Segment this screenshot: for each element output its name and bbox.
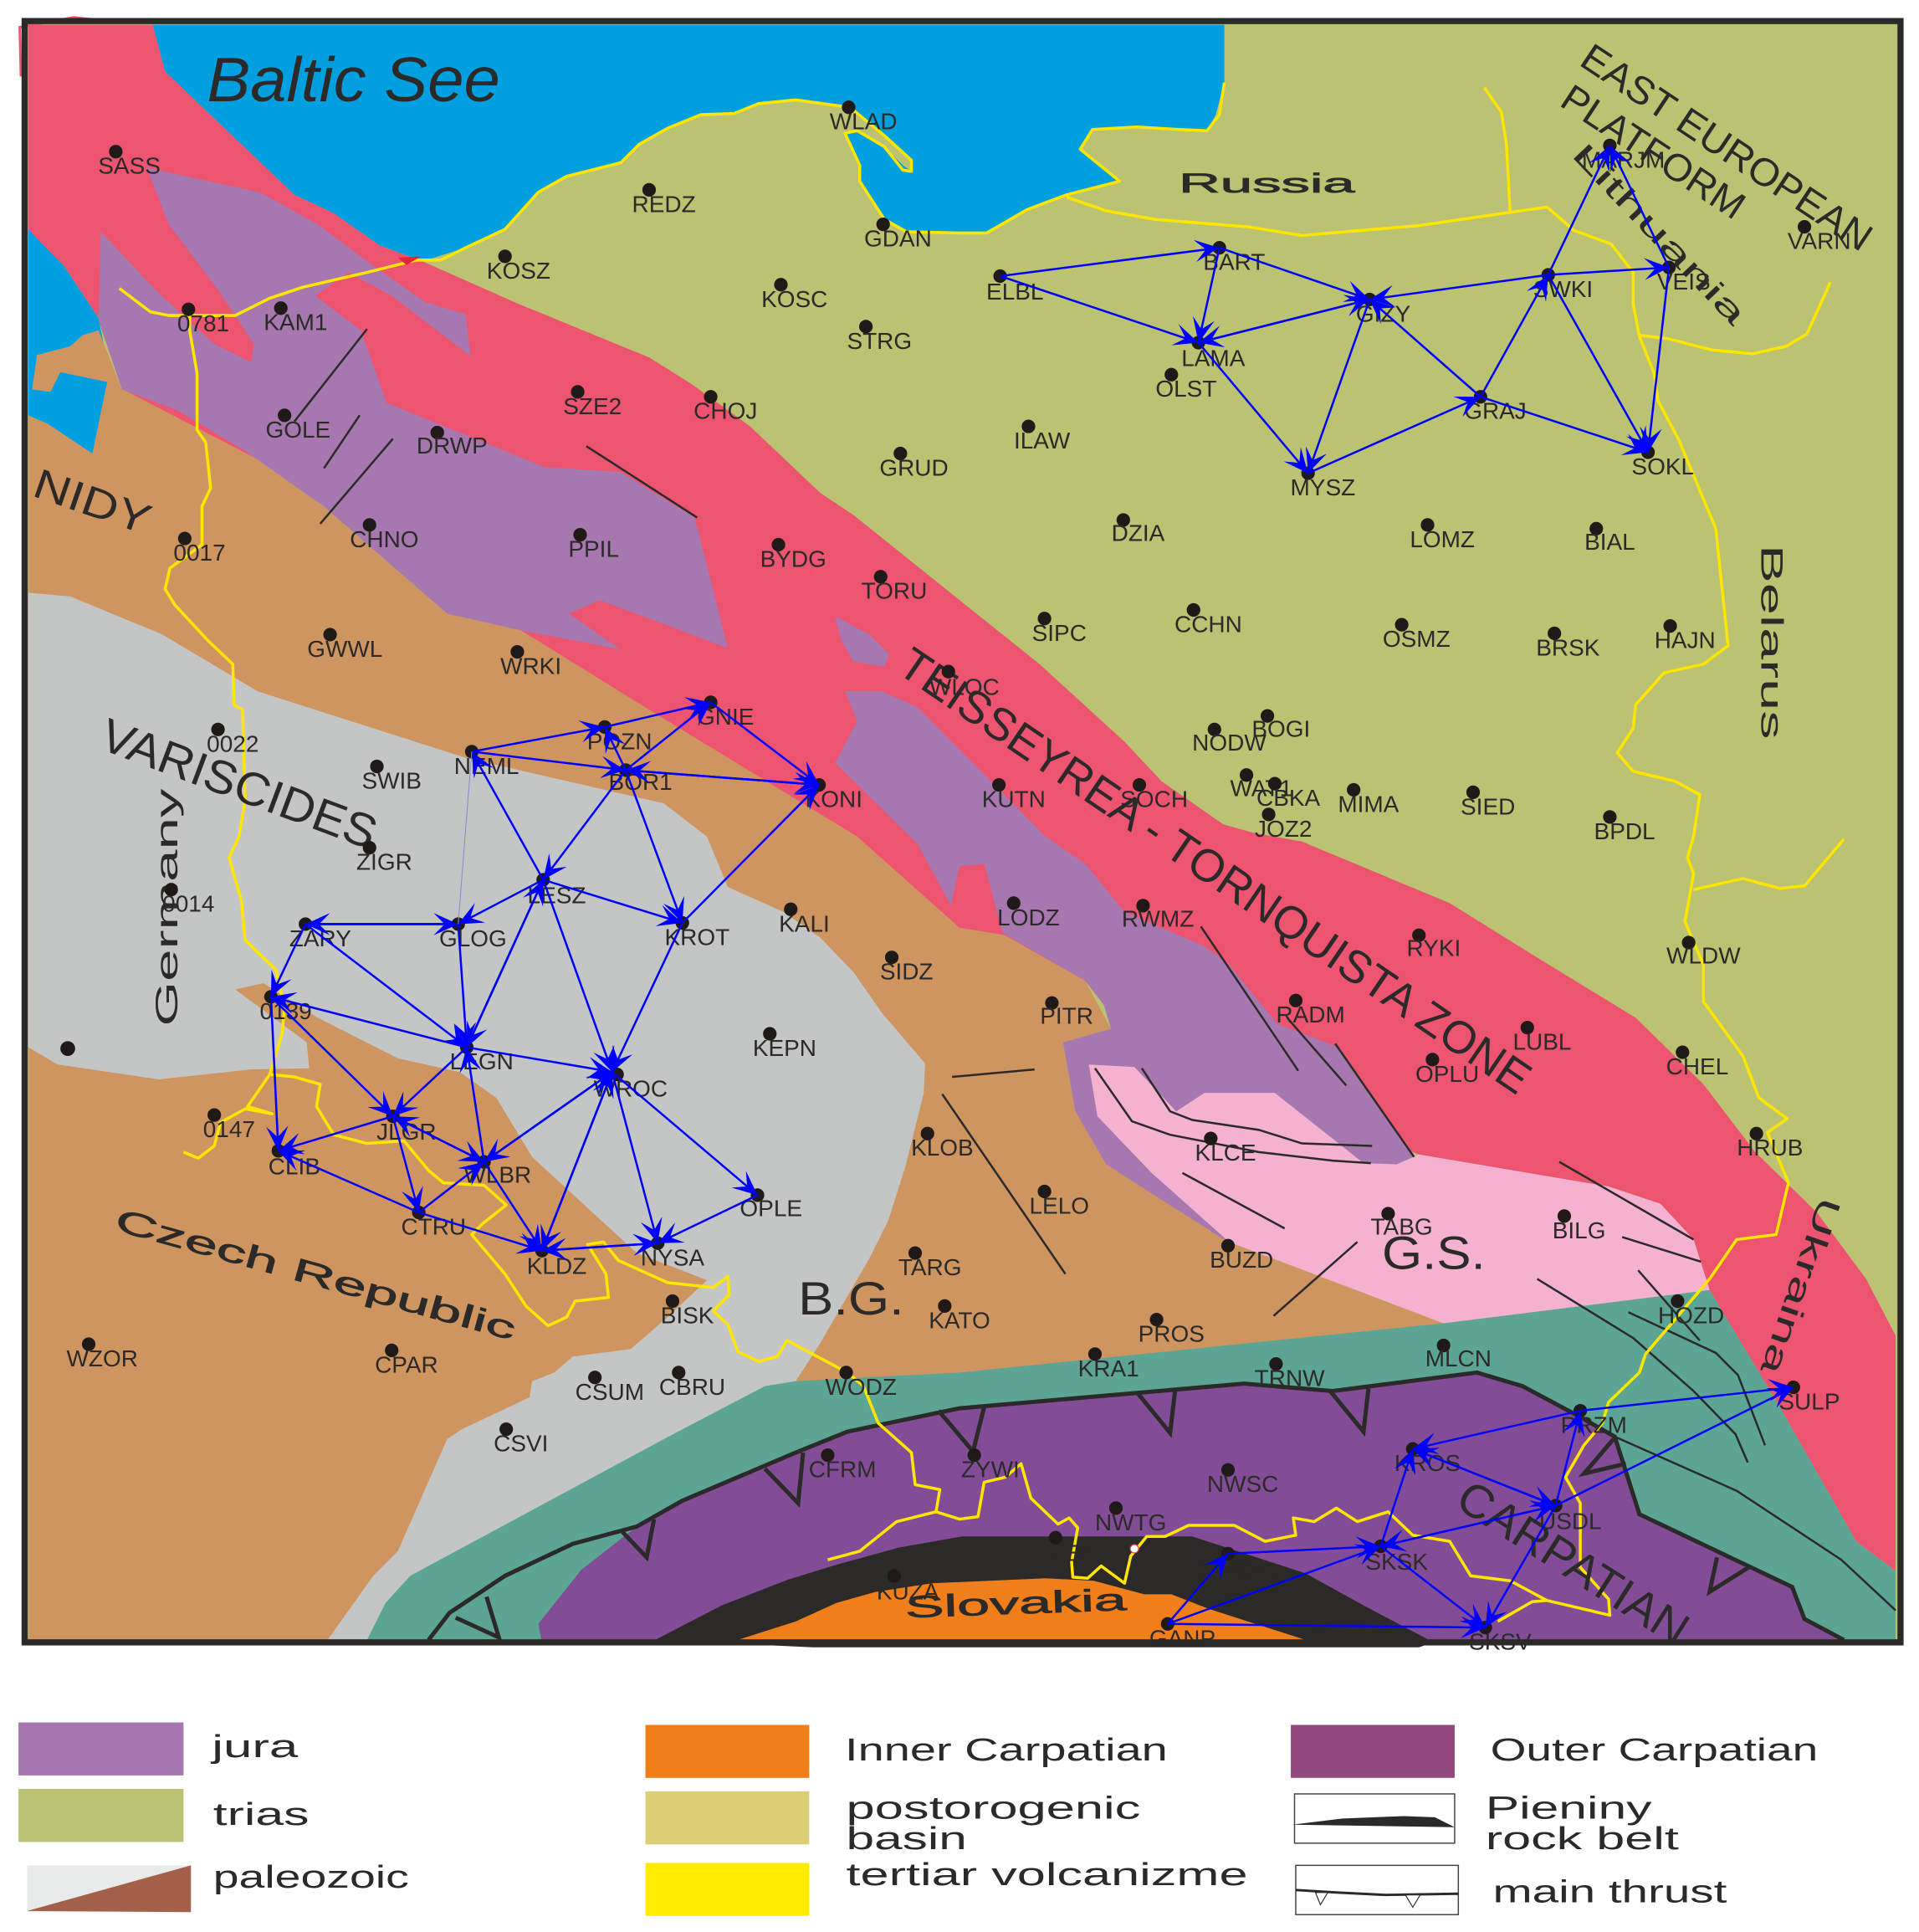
station WROC: WROC xyxy=(594,1076,668,1102)
region: jura small patch xyxy=(835,616,889,667)
station NEML: NEML xyxy=(454,753,519,779)
region: paleozoic variscides xyxy=(28,592,925,1642)
region: inner Carpathians xyxy=(738,1578,1306,1640)
station ZYWI: ZYWI xyxy=(961,1457,1020,1483)
legend item: main thrust xyxy=(1296,1865,1727,1914)
station VEIS: VEIS xyxy=(1657,269,1711,295)
station KOSC: KOSC xyxy=(761,286,827,312)
red stray stroke at frame corner xyxy=(20,18,96,76)
station SIPC: SIPC xyxy=(1032,620,1087,646)
main thrust line xyxy=(428,1372,1844,1640)
station CHEL: CHEL xyxy=(1666,1053,1728,1079)
station CCHN: CCHN xyxy=(1174,611,1242,637)
station JOZ2: JOZ2 xyxy=(1255,816,1312,842)
legend item: postorogenic basin: postorogenic xyxy=(847,1790,1140,1826)
station BPDL: BPDL xyxy=(1594,818,1655,844)
station ZARY: ZARY xyxy=(289,925,351,951)
station KAM1: KAM1 xyxy=(264,310,327,336)
station CFRM: CFRM xyxy=(809,1457,877,1483)
station KOSZ: KOSZ xyxy=(487,258,550,284)
station TORU: TORU xyxy=(862,578,927,604)
station BOR1: BOR1 xyxy=(609,769,673,795)
station 0017: 0017 xyxy=(173,540,226,566)
station MYSZ: MYSZ xyxy=(1291,474,1355,500)
station CPAR: CPAR xyxy=(375,1351,438,1377)
label: Nidy: NIDY xyxy=(28,459,157,543)
station CSUM: CSUM xyxy=(576,1379,644,1405)
thrust ticks xyxy=(456,1389,1749,1637)
station MIMA: MIMA xyxy=(1338,791,1400,817)
legend item: trias xyxy=(18,1789,310,1842)
station 0014: 0014 xyxy=(162,891,214,917)
legend item: jura: jura xyxy=(211,1729,299,1765)
station SIED: SIED xyxy=(1461,793,1515,819)
station NODW: NODW xyxy=(1192,730,1267,756)
station KLDZ: KLDZ xyxy=(527,1253,586,1279)
station SIDZ: SIDZ xyxy=(880,959,934,985)
legend item: Outer Carpatian xyxy=(1291,1724,1818,1778)
label: Platform: PLATFORM xyxy=(1553,76,1753,228)
station SKSV: SKSV xyxy=(1469,1629,1532,1655)
station LELO: LELO xyxy=(1029,1192,1089,1218)
blue baseline arrows: western network xyxy=(271,702,819,1251)
station GANP: GANP xyxy=(1149,1625,1215,1651)
blue baseline arrows: northern network xyxy=(1000,146,1669,474)
station DRWP: DRWP xyxy=(417,433,488,459)
station LEGN: LEGN xyxy=(450,1048,514,1074)
legend xyxy=(18,1723,1818,1916)
station GIZY: GIZY xyxy=(1356,300,1410,326)
station WAT1: WAT1 xyxy=(1230,775,1292,801)
label: G.S.: G.S. xyxy=(1382,1227,1486,1279)
station SWKI: SWKI xyxy=(1533,276,1593,302)
legend item: jura xyxy=(18,1723,299,1776)
station RYKI: RYKI xyxy=(1406,935,1461,961)
station LAMA: LAMA xyxy=(1181,345,1246,371)
label: East European: EAST EUROPEAN xyxy=(1574,35,1881,259)
station STRG: STRG xyxy=(847,328,912,354)
station GWWL: GWWL xyxy=(307,636,382,662)
station ILAW: ILAW xyxy=(1014,428,1071,454)
station WLAD: WLAD xyxy=(830,109,898,135)
label: Germany: Germany xyxy=(150,787,184,1027)
station OPLE: OPLE xyxy=(739,1195,802,1221)
station ZIGR: ZIGR xyxy=(356,849,412,875)
station PITR: PITR xyxy=(1040,1003,1093,1029)
station LESZ: LESZ xyxy=(528,882,586,908)
faint baseline xyxy=(458,751,472,924)
station OLST: OLST xyxy=(1155,376,1216,402)
station NWSC: NWSC xyxy=(1207,1471,1278,1497)
station 0147: 0147 xyxy=(203,1116,255,1142)
red mark on the coast xyxy=(398,256,422,265)
station BOGI: BOGI xyxy=(1251,716,1310,742)
white marker near LIE1 xyxy=(1130,1545,1139,1553)
region: western sea xyxy=(28,229,111,454)
station KEPN: KEPN xyxy=(753,1035,816,1061)
station SOCH: SOCH xyxy=(1120,787,1188,812)
station BISK: BISK xyxy=(661,1302,714,1328)
region: brown foreland xyxy=(28,331,1444,1642)
station PROS: PROS xyxy=(1139,1321,1205,1347)
station TARG: TARG xyxy=(898,1254,961,1280)
station OSMZ: OSMZ xyxy=(1383,626,1451,652)
station BIAL: BIAL xyxy=(1584,529,1635,555)
label: Teisseyrea Tornquista zone: TEISSEYREA - TORNQUISTA ZONE xyxy=(890,638,1540,1104)
region: jura northern band xyxy=(99,167,728,649)
label: Carpatian: CARPATIAN xyxy=(1448,1469,1699,1656)
station KATO: KATO xyxy=(929,1307,990,1333)
station KROT: KROT xyxy=(665,924,729,950)
label: Belarus: Belarus xyxy=(1755,545,1789,740)
station LUBL: LUBL xyxy=(1512,1029,1571,1055)
station LODZ: LODZ xyxy=(997,905,1060,930)
station OPLU: OPLU xyxy=(1415,1061,1479,1087)
station PPIL: PPIL xyxy=(568,536,619,562)
legend item: paleozoic: paleozoic xyxy=(213,1859,409,1895)
station CTRU: CTRU xyxy=(401,1213,466,1239)
region: jura southern band xyxy=(835,691,1415,1244)
station TABG: TABG xyxy=(1371,1213,1433,1239)
station 0139: 0139 xyxy=(259,998,312,1024)
station GLOG: GLOG xyxy=(439,925,507,951)
station CBKA: CBKA xyxy=(1256,785,1321,811)
station GRUD: GRUD xyxy=(879,454,949,480)
legend item: postorogenic basin xyxy=(646,1790,1140,1857)
station CLIB: CLIB xyxy=(269,1153,320,1179)
label: Russia: Russia xyxy=(1179,168,1355,198)
legend item: tertiar volcanizme: tertiar volcanizme xyxy=(847,1857,1248,1893)
legend item: main thrust: main thrust xyxy=(1493,1874,1727,1910)
region: teal foredeep xyxy=(367,1290,1896,1642)
station GOLE: GOLE xyxy=(265,417,330,443)
legend item: Inner Carpatian: Inner Carpatian xyxy=(845,1732,1168,1768)
station DZIA: DZIA xyxy=(1112,520,1165,546)
station HOZD: HOZD xyxy=(1658,1302,1724,1328)
station GRAJ: GRAJ xyxy=(1464,398,1527,424)
station KROS: KROS xyxy=(1394,1450,1461,1476)
station MARJM: MARJM xyxy=(1582,146,1665,172)
station BART: BART xyxy=(1203,249,1265,275)
station BYDG: BYDG xyxy=(760,546,826,571)
station WLDW: WLDW xyxy=(1666,943,1741,969)
station SWIB: SWIB xyxy=(361,767,422,793)
station SKSK: SKSK xyxy=(1365,1549,1428,1575)
station BRSK: BRSK xyxy=(1536,634,1600,660)
label: Lithuania: Lithuania xyxy=(1566,136,1754,332)
station KUTN: KUTN xyxy=(982,787,1046,812)
station CBRU: CBRU xyxy=(659,1374,725,1400)
station CSVI: CSVI xyxy=(494,1431,548,1457)
station HRUB: HRUB xyxy=(1737,1135,1803,1161)
station RWMZ: RWMZ xyxy=(1122,905,1194,931)
station KONI: KONI xyxy=(806,787,862,812)
region: Baltic Sea xyxy=(28,25,1225,261)
legend item: trias: trias xyxy=(213,1796,310,1832)
station BUZD: BUZD xyxy=(1210,1247,1273,1273)
label: Ukraina: Ukraina xyxy=(1753,1192,1847,1380)
station KLCE: KLCE xyxy=(1195,1140,1256,1166)
station WODZ: WODZ xyxy=(825,1374,897,1400)
station LOMZ: LOMZ xyxy=(1410,526,1475,552)
region: Pieniny klippen belt xyxy=(655,1536,1434,1648)
station USDL: USDL xyxy=(1539,1508,1602,1534)
station NYSA: NYSA xyxy=(641,1244,704,1270)
region: Teisseyre-Tornquist zone xyxy=(28,25,1896,1571)
station SZE2: SZE2 xyxy=(563,393,622,419)
station LIE1: LIE1 xyxy=(1045,1540,1093,1566)
label: B.G.: B.G. xyxy=(798,1272,904,1325)
station GNIE: GNIE xyxy=(697,704,754,730)
station HAJN: HAJN xyxy=(1655,628,1716,653)
station WLOC: WLOC xyxy=(929,674,1000,700)
legend item: Inner Carpatian xyxy=(646,1724,1168,1778)
station WLBR: WLBR xyxy=(463,1162,531,1188)
station WZOR: WZOR xyxy=(66,1345,138,1371)
station SKSL: SKSL xyxy=(1214,1555,1274,1581)
yellow borders and coastline xyxy=(120,83,1844,1622)
blue baseline arrows: Carpathian network xyxy=(1168,1387,1794,1627)
legend item: Pieniny rock belt: Pieniny xyxy=(1486,1790,1653,1826)
station JLGR: JLGR xyxy=(376,1119,437,1145)
legend item: Outer Carpatian: Outer Carpatian xyxy=(1491,1732,1818,1768)
unnamed station dot xyxy=(60,1041,75,1056)
station KRA1: KRA1 xyxy=(1078,1355,1139,1381)
label: Variscides: VARISCIDES xyxy=(94,708,385,859)
station 0022: 0022 xyxy=(207,730,258,756)
station WRKI: WRKI xyxy=(500,653,561,679)
station CHOJ: CHOJ xyxy=(693,398,757,424)
label: Baltic See: Baltic See xyxy=(207,44,500,115)
region: G.S. pink xyxy=(1089,1064,1710,1323)
station TRNW: TRNW xyxy=(1255,1366,1325,1391)
station KUZA: KUZA xyxy=(877,1578,939,1604)
station GDAN: GDAN xyxy=(864,226,932,252)
station SASS: SASS xyxy=(98,153,161,179)
GPS stations xyxy=(60,100,1851,1655)
label: Slovakia: Slovakia xyxy=(904,1582,1128,1624)
station CHNO: CHNO xyxy=(350,526,419,552)
station ELBL: ELBL xyxy=(986,279,1043,305)
station VARN: VARN xyxy=(1788,228,1851,254)
station 0781: 0781 xyxy=(177,310,229,336)
legend item: tertiar volcanizme xyxy=(646,1857,1248,1916)
region: outer Carpathians xyxy=(538,1372,1844,1642)
station KALI: KALI xyxy=(779,910,830,936)
label: Czech Republic: Czech Republic xyxy=(111,1202,519,1347)
station RADM: RADM xyxy=(1276,1002,1345,1027)
station PRZM: PRZM xyxy=(1561,1412,1627,1438)
legend item: postorogenic basin: basin xyxy=(847,1821,967,1857)
legend item: paleozoic xyxy=(27,1859,409,1912)
legend item: Pieniny rock belt: rock belt xyxy=(1486,1821,1679,1857)
station NWTG: NWTG xyxy=(1095,1509,1166,1535)
legend item: Pieniny rock belt xyxy=(1292,1790,1679,1857)
station SOKL: SOKL xyxy=(1631,454,1694,479)
station REDZ: REDZ xyxy=(632,191,696,217)
station BILG: BILG xyxy=(1553,1217,1605,1243)
station KLOB: KLOB xyxy=(911,1135,974,1161)
station SULP: SULP xyxy=(1778,1389,1840,1415)
fault lines xyxy=(294,329,1896,1611)
station POZN: POZN xyxy=(587,728,652,754)
station MLCN: MLCN xyxy=(1425,1345,1492,1371)
